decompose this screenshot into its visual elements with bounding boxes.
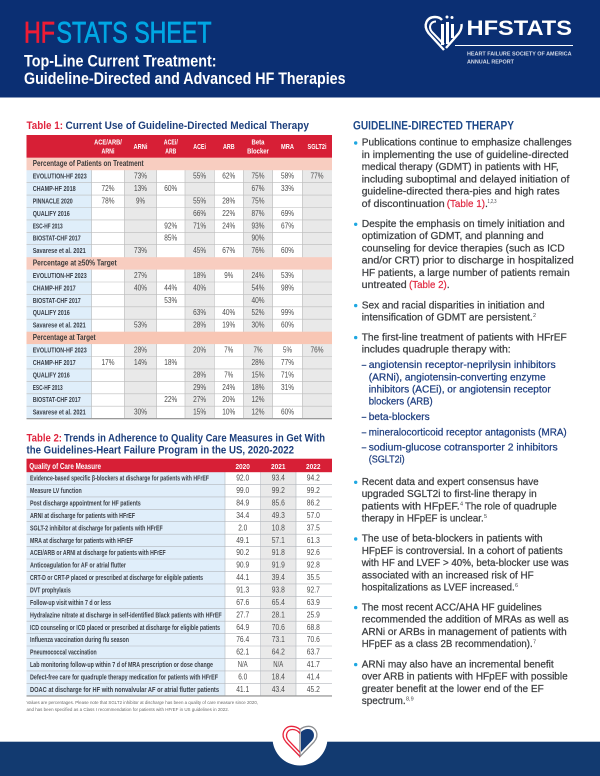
section: percentage at 50% target: 40% <box>222 308 235 317</box>
section: percentage at target: 30% <box>134 408 147 417</box>
bullet: ACC/AHA guidelines: ARNi or ARBs in management of patients with <box>362 626 567 638</box>
table 2 rows <box>30 474 320 694</box>
section: percentage at 50% target: QUALIFY 2016 <box>33 308 70 317</box>
table 2 rows: 39.4 <box>272 573 285 582</box>
table 1 header row: MRA <box>281 142 294 151</box>
table 2: quality of care measures <box>26 459 332 697</box>
section: percentage at target: ESC-HF 2013 <box>33 383 63 392</box>
drug class list: blockers (ARB) <box>369 396 433 408</box>
bullet: ARNi incremental benefit: 8,9 <box>406 696 414 702</box>
section: percentage of patients on treatment: 13% <box>134 184 147 193</box>
table 2 rows: 92.7 <box>307 586 320 594</box>
table 2 rows: Evidence-based specific β-blockers at discharge for patients with HFrEF <box>30 474 209 483</box>
section: percentage at target: 29% <box>193 383 206 392</box>
section: percentage of patients on treatment: 9% <box>136 196 145 206</box>
table 2 rows: 92.6 <box>307 548 320 557</box>
bullet: SGLT2i in HFpEF: upgraded SGLT2i to first-line therapy in <box>362 488 537 500</box>
bullet: beta-blockers in HFpEF: with HF and LVEF > 40%, beta-blocker use was <box>361 557 569 569</box>
bullet: SGLT2i in HFpEF: 5 <box>484 514 487 520</box>
table 2 footnote <box>26 700 258 713</box>
section: percentage of patients on treatment: 72% <box>102 184 114 193</box>
section: percentage of patients on treatment: 77% <box>310 172 324 181</box>
section: percentage at target: EVOLUTION-HF 2023 <box>33 346 87 354</box>
section: percentage at 50% target: 60% <box>281 321 294 330</box>
section: percentage at target: 12% <box>252 395 264 404</box>
table 1 header row: Blocker <box>247 146 269 155</box>
drug class list: mineralocorticoid receptor antagonists (MRA) <box>369 426 567 438</box>
logo: HFSTATS: HFSTATS <box>466 16 572 40</box>
table 2 rows: 70.6 <box>272 623 285 632</box>
title: HFSTATS SHEET <box>24 16 212 49</box>
bullet: publications: 1,2,3 <box>488 199 496 205</box>
section: percentage at target: 28% <box>193 370 206 379</box>
table 2 rows: 67.6 <box>236 598 250 607</box>
section: percentage of patients on treatment: 69% <box>281 209 294 218</box>
table 2 rows: 64.2 <box>272 648 285 657</box>
bullet: publications: (Table 1) <box>447 198 485 210</box>
table 2 header row <box>26 459 332 472</box>
drug class list: inhibitors (ACEi), or angiotensin receptor <box>369 383 551 395</box>
section: percentage at target: 28% <box>134 346 147 354</box>
section: percentage of patients on treatment: EVOLUTION-HF 2023 <box>33 172 87 181</box>
table 2 rows: 43.4 <box>272 685 285 694</box>
bullet: ACC/AHA guidelines: 7 <box>533 639 536 645</box>
section: percentage at 50% target: 40% <box>134 283 147 292</box>
table 2 rows: 65.4 <box>272 598 285 607</box>
section: percentage at 50% target: 9% <box>224 271 233 280</box>
section: percentage of patients on treatment: 73% <box>134 172 147 181</box>
bullet: SGLT2i in HFpEF: 4 <box>460 502 463 508</box>
table 1: current use of GDMT <box>26 135 332 419</box>
bullet: beta-blockers in HFpEF: The use of beta-blockers in patients with <box>362 533 543 545</box>
section: percentage at 50% target: CHAMP-HF 2017 <box>33 283 76 292</box>
table 2 rows: Hydralazine nitrate at discharge in self-identified Black patients with HFrEF <box>30 610 222 619</box>
bullet: beta-blockers in HFpEF: hospitalizations as LVEF increased. <box>362 582 515 594</box>
bullet: publications: in implementing the use of guideline-directed <box>362 149 569 161</box>
table 2 rows: 61.3 <box>307 536 320 545</box>
table 2 rows: 49.3 <box>272 511 285 520</box>
table 2 rows: 34.4 <box>236 511 250 520</box>
drug class list: beta-blockers <box>369 411 430 423</box>
drug class list: (SGLT2i) <box>369 454 405 466</box>
table 2 rows: 6.0 <box>238 672 248 682</box>
table 2 rows: N/A <box>273 660 284 669</box>
drug class list: – <box>362 426 366 438</box>
table 2 rows: 64.9 <box>236 623 250 632</box>
section: percentage at target: 7% <box>254 346 262 354</box>
section: percentage at 50% target: 53% <box>134 321 147 330</box>
table 2 rows: Pneumococcal vaccination <box>30 648 97 657</box>
header banner <box>0 0 600 98</box>
bullet: first-line treatment with quadruple therapy: The first-line treatment of patients with HFrEF <box>362 331 567 343</box>
table 1 header row: ARB <box>223 142 235 151</box>
section: percentage at target: 28% <box>252 358 264 367</box>
section: percentage at 50% target: 53% <box>164 296 177 305</box>
section: percentage at 50% target: 53% <box>281 271 294 280</box>
section: percentage at target: 60% <box>281 408 294 417</box>
table 2 rows: 76.4 <box>236 635 250 644</box>
section: percentage of patients on treatment: 33% <box>281 184 294 193</box>
bullet: beta-blockers in HFpEF: associated with an increased risk of HF <box>362 569 534 581</box>
section: percentage at target: 27% <box>193 395 206 404</box>
bullet: beta-blockers in HFpEF <box>354 533 569 594</box>
section: percentage at 50% target: 99% <box>281 308 294 317</box>
table 2 rows: Follow-up visit within 7 d or less <box>30 598 111 607</box>
section: percentage at target: 18% <box>164 358 177 367</box>
section: percentage of patients on treatment: 75% <box>252 172 264 181</box>
section: percentage of patients on treatment: 60% <box>164 184 177 193</box>
section: percentage at target: QUALIFY 2016 <box>33 370 70 379</box>
bullet: ARNi incremental benefit: greater benefit at the lower end of the EF <box>362 683 544 695</box>
table 2 rows: 41.7 <box>307 660 320 669</box>
bullet: emphasis on timely initiation <box>354 218 574 291</box>
bullet: ARNi incremental benefit: over ARB in patients with HFpEF with possible <box>362 671 568 683</box>
section: percentage at target: 5% <box>283 346 292 354</box>
table 2 rows: 84.9 <box>236 498 250 508</box>
section: percentage at 50% target: BIOSTAT-CHF 2017 <box>33 296 81 305</box>
section: percentage of patients on treatment: CHAMP-HF 2018 <box>33 184 76 193</box>
bullet: emphasis on timely initiation: untreated <box>362 279 407 291</box>
bullet: disparities: 2 <box>533 313 536 319</box>
table 2 rows: 99.2 <box>307 486 320 495</box>
section: percentage of patients on treatment: 58% <box>281 172 294 181</box>
section: percentage of patients on treatment: 24% <box>222 221 235 230</box>
section: percentage at 50% target: 24% <box>252 271 264 280</box>
bullet: ARNi incremental benefit: spectrum. <box>362 695 406 707</box>
table 2 rows: 2.0 <box>238 523 248 532</box>
table 2 rows: ACEI/ARB or ARNI at discharge for patients with HFrEF <box>30 548 166 557</box>
bullet: ACC/AHA guidelines: recommended the addition of MRAs as well as <box>362 614 569 626</box>
section: percentage at target: 10% <box>222 408 235 417</box>
table 2 title <box>26 433 325 456</box>
section: percentage at 50% target: 52% <box>252 308 264 317</box>
bullet: emphasis on timely initiation: HF patients, a large number of patients remain <box>362 267 570 279</box>
bullet: publications: medical therapy (GDMT) in patients with HF, <box>362 161 559 173</box>
section: percentage at target: CHAMP-HF 2017 <box>33 358 76 367</box>
table 2 rows: 92.8 <box>307 561 320 570</box>
subtitle <box>24 52 346 88</box>
drug class list: – <box>362 359 366 371</box>
section: percentage of patients on treatment: 60% <box>281 246 294 255</box>
logo: HFSTATS: ANNUAL REPORT <box>467 60 515 66</box>
bullet: SGLT2i in HFpEF <box>354 476 557 525</box>
section: percentage at 50% target: EVOLUTION-HF 2023 <box>33 271 87 280</box>
drug class list: – <box>362 442 366 454</box>
table 2 header row: 2020 <box>235 462 250 471</box>
section: percentage at 50% target: Percentage at ≥50% Target <box>33 259 117 268</box>
drug class list: – <box>362 411 366 423</box>
table 2 rows: 57.0 <box>307 511 320 520</box>
bullet: beta-blockers in HFpEF: HFpEF is controversial. In a cohort of patients <box>362 545 563 557</box>
bullet: ACC/AHA guidelines: HFpEF as a class 2B recommendation). <box>362 638 533 650</box>
section: percentage of patients on treatment: 93% <box>252 221 264 230</box>
table 1 title: Current Use of Guideline-Directed Medical Therapy <box>66 120 309 132</box>
bullet: publications: of discontinuation <box>362 198 445 210</box>
section: percentage at 50% target: 40% <box>193 283 206 292</box>
table 2 header row: 2022 <box>306 462 321 471</box>
heading: guideline-directed therapy: GUIDELINE-DIRECTED THERAPY <box>353 121 514 133</box>
icon: logo heart <box>426 16 462 50</box>
bullet: first-line treatment with quadruple therapy <box>354 331 567 466</box>
section: percentage at 50% target: 44% <box>164 283 177 292</box>
section: percentage of patients on treatment: 92% <box>164 221 177 230</box>
footer band <box>0 710 600 776</box>
table 2 rows: 90.9 <box>236 561 250 570</box>
section: percentage at target: 20% <box>222 395 235 404</box>
bullet: SGLT2i in HFpEF: patients with HFpEF. <box>362 500 460 512</box>
section: percentage at target: 17% <box>102 358 114 367</box>
bullet: emphasis on timely initiation: Despite the emphasis on timely initiation and <box>362 218 565 230</box>
table 2 rows: 44.1 <box>236 573 250 582</box>
section: percentage at 50% target: Savarese et al. 2021 <box>33 321 86 330</box>
table 2 rows: 63.9 <box>307 598 320 607</box>
bullet: ARNi incremental benefit: ARNi may also have an incremental benefit <box>362 658 554 670</box>
section: percentage of patients on treatment: 45% <box>193 246 206 255</box>
section: percentage of patients on treatment: 85% <box>164 234 177 243</box>
section: percentage at target: BIOSTAT-CHF 2017 <box>33 395 81 404</box>
bullet: ACC/AHA guidelines: The most recent ACC/AHA HF guidelines <box>362 601 542 613</box>
section: percentage at 50% target: 63% <box>193 308 206 317</box>
bullet: ARNi incremental benefit <box>354 658 568 707</box>
table 2 rows: MRA at discharge for patients with HFrEF <box>30 536 133 545</box>
table 2 title: the Guidelines-Heart Failure Program in the US, 2020-2022 <box>26 444 294 456</box>
bullet: publications <box>354 137 572 210</box>
table 2 rows: 45.2 <box>307 685 320 694</box>
section: percentage of patients on treatment: PINNACLE 2020 <box>33 196 73 206</box>
drug class list: angiotensin receptor-neprilysin inhibitors <box>369 359 556 371</box>
section: percentage of patients on treatment: 55% <box>193 172 206 181</box>
table 2 rows: 28.1 <box>272 610 285 619</box>
table 2 rows: 57.1 <box>272 536 285 545</box>
table 2 rows: 10.8 <box>272 523 285 532</box>
bullet: first-line treatment with quadruple therapy: includes quadruple therapy with: <box>362 344 511 356</box>
table 2 header row: Quality of Care Measure <box>29 461 101 471</box>
section: percentage of patients on treatment: ESC-HF 2013 <box>33 221 63 230</box>
subtitle: Top-Line Current Treatment: <box>24 52 216 70</box>
section: percentage at target: 15% <box>252 370 264 379</box>
section: percentage at target: 7% <box>224 370 233 379</box>
bullet: emphasis on timely initiation: . <box>447 279 450 291</box>
table 2 title: Table 2: <box>26 433 62 445</box>
bullet: publications: including suboptimal and delayed initiation of <box>362 173 569 185</box>
section: percentage at target: 71% <box>281 370 294 379</box>
section: percentage at target: 22% <box>164 395 177 404</box>
logo: HFSTATS: HEART FAILURE SOCIETY OF AMERICA <box>467 52 572 58</box>
table 2 rows: CRT-D or CRT-P placed or prescribed at discharge for eligible patients <box>30 573 203 582</box>
section: percentage of patients on treatment: 75% <box>252 196 264 206</box>
section: percentage of patients on treatment: BIOSTAT-CHF 2017 <box>33 234 81 243</box>
bullet: publications: Publications continue to emphasize challenges <box>362 137 572 149</box>
section: percentage at 50% target: 28% <box>193 321 206 330</box>
table 2 rows: ARNI at discharge for patients with HFrEF <box>30 511 135 520</box>
bullet: beta-blockers in HFpEF: 6 <box>515 583 518 589</box>
section: percentage at target: 77% <box>281 358 294 367</box>
table 1 header row: ARNi <box>134 142 148 151</box>
table 2 rows: 91.9 <box>272 561 285 570</box>
section: percentage of patients on treatment: 73% <box>134 246 147 255</box>
table 2 rows: 41.4 <box>307 672 320 682</box>
table 2 rows: 25.9 <box>307 610 320 619</box>
section: percentage at 50% target <box>26 257 332 330</box>
section: percentage at 50% target: 98% <box>281 283 294 292</box>
table 1 header row: ACEi <box>193 142 206 151</box>
table 2 rows: 86.2 <box>307 498 320 508</box>
table 1 header row: SGLT2i <box>308 142 326 151</box>
bullet: ACC/AHA guidelines <box>354 601 569 650</box>
section: percentage of patients on treatment: 28% <box>222 196 235 206</box>
table 2 footnote: Values are percentages. Please note that SGLT2 inhibitor at discharge has been a quality of care measure since 2020, <box>26 700 258 706</box>
table 2 rows: 99.0 <box>236 486 250 495</box>
table 2 rows: 93.4 <box>272 474 285 483</box>
table 2 rows: 91.8 <box>272 548 285 557</box>
section: percentage at target: 76% <box>310 346 324 354</box>
section: percentage at 50% target: 19% <box>222 321 235 330</box>
table 2 rows: 18.4 <box>272 672 285 682</box>
subtitle: Guideline-Directed and Advanced HF Therapies <box>24 69 346 88</box>
table 2 rows: 35.5 <box>307 573 320 582</box>
section: percentage at 50% target: 27% <box>134 271 147 280</box>
table 2 rows: 85.6 <box>272 498 285 508</box>
table 2 rows: 41.1 <box>236 685 250 694</box>
table 2 rows: 49.1 <box>236 536 250 545</box>
section: percentage of patients on treatment: 76% <box>252 246 264 255</box>
section: percentage of patients on treatment: 66% <box>193 209 206 218</box>
table 2 rows: SGLT-2 inhibitor at discharge for patients with HFrEF <box>30 523 163 532</box>
table 2 rows: 73.1 <box>272 635 285 644</box>
section: percentage at target: 7% <box>224 346 233 354</box>
section: percentage of patients on treatment <box>26 158 332 255</box>
table 2 rows: Post discharge appointment for HF patients <box>30 498 141 508</box>
section: percentage of patients on treatment: 87% <box>252 209 264 218</box>
table 2 rows: DOAC at discharge for HF with nonvalvular AF or atrial flutter patients <box>30 685 219 694</box>
table 2 rows: Influenza vaccination during flu season <box>30 635 129 644</box>
table 1 header row: ARB <box>165 146 177 155</box>
section: percentage at target <box>26 332 332 417</box>
section: percentage at target: 20% <box>193 346 206 354</box>
bullet: SGLT2i in HFpEF: The role of quadruple <box>465 500 557 512</box>
table 2 rows: 70.6 <box>307 635 320 644</box>
table 2 rows: 93.8 <box>272 586 285 594</box>
section: percentage at 50% target: 18% <box>193 271 206 280</box>
section: percentage of patients on treatment: Savarese et al. 2021 <box>33 246 86 255</box>
section: percentage of patients on treatment: 62% <box>222 172 235 181</box>
table 1 header row: Beta <box>252 138 265 147</box>
table 2 rows: N/A <box>238 660 248 669</box>
table 2 rows: Lab monitoring follow-up within 7 d of MRA prescription or dose change <box>30 660 213 669</box>
drug class list <box>362 359 567 466</box>
bullet: disparities: Sex and racial disparities in initiation and <box>362 299 545 311</box>
table 2 rows: Measure LV function <box>30 486 82 495</box>
table 2 rows: Anticoagulation for AF or atrial flutter <box>30 561 126 570</box>
section: percentage at target: 14% <box>134 358 147 367</box>
bullet: SGLT2i in HFpEF: therapy in HFpEF is unclear. <box>362 513 484 525</box>
table 1 header row: ACE/ARB/ <box>94 138 123 147</box>
table 1 header row <box>26 135 332 158</box>
table 2 rows: 90.2 <box>236 548 250 557</box>
table 2 rows: 94.2 <box>307 474 320 483</box>
section: percentage at 50% target: 30% <box>252 321 264 330</box>
section: percentage at target: 31% <box>281 383 294 392</box>
bullet: disparities <box>354 299 545 324</box>
bullet: publications: . <box>485 198 488 210</box>
table 2 rows: 37.5 <box>307 523 320 532</box>
bullet: emphasis on timely initiation: (Table 2) <box>409 279 447 291</box>
drug class list: sodium-glucose cotransporter 2 inhibitors <box>369 442 558 454</box>
section: percentage at target: 24% <box>222 383 235 392</box>
table 2 rows: DVT prophylaxis <box>30 586 71 594</box>
table 2 rows: ICD counseling or ICD placed or prescribed at discharge for eligible patients <box>30 623 220 632</box>
section: percentage at target: 15% <box>193 408 206 417</box>
table 2 rows: Defect-free care for quadruple therapy medication for patients with HFrEF <box>30 672 218 682</box>
section: percentage of patients on treatment: 67% <box>222 246 235 255</box>
table 2 footnote: and has been specified as a Class I recommendation for patients with HFrEF in US guidelines in 2022. <box>26 707 229 713</box>
section: percentage of patients on treatment: 71% <box>193 221 206 230</box>
bullet: SGLT2i in HFpEF: Recent data and expert consensus have <box>362 476 539 488</box>
section: percentage of patients on treatment: 78% <box>102 196 114 206</box>
bullet: emphasis on timely initiation: counseling for device therapies (such as ICD <box>362 242 565 254</box>
table 1 header row: ARNi <box>102 146 114 155</box>
section: percentage of patients on treatment: QUALIFY 2016 <box>33 209 70 218</box>
title: HFSTATS SHEET: HF <box>24 16 55 49</box>
section: percentage at target: Savarese et al. 2021 <box>33 408 86 417</box>
section: percentage of patients on treatment: 90% <box>252 234 264 243</box>
section: percentage of patients on treatment: 55% <box>193 196 206 206</box>
section: percentage at target: Percentage at Target <box>33 333 96 342</box>
section: percentage at 50% target: 40% <box>252 296 264 305</box>
logo: HFSTATS <box>426 16 573 66</box>
icon: footer heart <box>283 726 317 756</box>
table 1 title: Table 1: <box>26 120 63 132</box>
section: percentage at target: 12% <box>252 408 264 417</box>
table 2 rows: 91.3 <box>236 586 250 594</box>
table 2 rows: 92.0 <box>236 474 250 483</box>
section: percentage at target: 18% <box>252 383 264 392</box>
title: HFSTATS SHEET: STATS SHEET <box>56 16 212 49</box>
table 2 header row: 2021 <box>271 462 286 471</box>
bullet: emphasis on timely initiation: optimization of GDMT, and planning and <box>362 230 544 242</box>
table 2 rows: 63.7 <box>307 648 320 657</box>
bullet: publications: guideline-directed thera-pies and high rates <box>362 186 560 198</box>
table 2 title: Trends in Adherence to Quality Care Measures in Get With <box>64 433 325 445</box>
table 2 rows: 62.1 <box>236 648 250 657</box>
section: percentage of patients on treatment: 22% <box>222 209 235 218</box>
table 2 rows: 68.8 <box>307 623 320 632</box>
section: percentage of patients on treatment: 67% <box>281 221 294 230</box>
section: percentage of patients on treatment: 67% <box>252 184 264 193</box>
section: percentage of patients on treatment: Percentage of Patients on Treatment <box>33 159 144 168</box>
table 2 rows: 27.7 <box>236 610 250 619</box>
table 1 header row: ACEi/ <box>164 138 178 147</box>
bullet: emphasis on timely initiation: and/or CRT) prior to discharge in hospitalized <box>362 255 574 267</box>
bullet: disparities: intensification of GDMT are persistent. <box>362 312 533 324</box>
section: percentage at 50% target: 54% <box>252 283 264 292</box>
drug class list: (ARNi), angiotensin-converting enzyme <box>369 371 546 383</box>
table 2 rows: 99.2 <box>272 486 285 495</box>
